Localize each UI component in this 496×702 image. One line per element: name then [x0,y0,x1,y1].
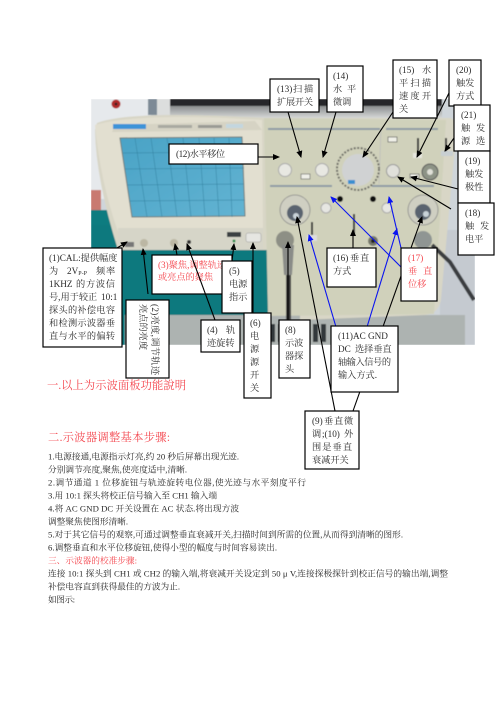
callout 13: sweep expand switch: (13) [277,84,292,94]
callout 8: probe: 头 [285,363,295,374]
text block: adjustment steps: 4.将 AC GND DC 开关设置在 AC 状态.将出现方波 [48,502,239,514]
callout 9 and 10: vertical attenuator: 外 [344,428,354,439]
callout 2: intensity (rotated) [126,300,169,378]
callout 5: power indicator: 电源 [229,278,248,289]
callout 14: horizontal fine: 平 [347,84,356,94]
callout 16: vertical mode: 方式 [333,265,351,276]
callout 17: vertical position: (17) [408,253,423,263]
callout 8: probe: (8) [285,325,296,335]
callout 19: trigger polarity: 触发 [465,168,483,179]
callout 11: input coupling: 输入方式. [338,369,377,380]
arrow: 14 to horizontal fine [323,112,336,157]
callout 14: horizontal fine: 水 [333,84,342,94]
callout 1: CAL: 直与水平的偏转 [49,330,115,341]
text block: adjustment steps: 调整聚焦使图形清晰. [48,516,128,526]
callout 9 and 10: vertical attenuator: (9) [312,416,323,426]
callout 13: sweep expand switch: 描 [304,83,313,94]
callout 5: power indicator: 指示 [229,291,248,302]
callout 9 and 10: vertical attenuator: 围是垂直 [312,441,352,452]
callout 12: horizontal position [169,144,258,164]
arrow: 1 to CAL [117,242,127,248]
text block: adjustment steps: 2.调节通道 1 位移旋钮与轨迹旋转电位器,使光迹与水平刻度平行 [48,476,306,488]
callout 18: trigger level: 发 [480,220,489,231]
callout 11: input coupling: DC [338,344,351,354]
callout 5: power indicator: (5) [229,266,240,276]
callout 2: intensity (rotated): (2)亮度,调节轨迹 [150,304,161,376]
callout 1: CAL: 为 [49,266,58,276]
callout 4: trace rotation: 轨 [226,324,235,335]
callout 9 and 10: vertical attenuator: ;(10) [322,429,340,439]
text block: adjustment steps: 1.电源接通,电源指示灯亮,约 20 秒后屏幕出现光迹. [48,450,239,462]
callout 15: horizontal sweep speed: 速度开 [399,90,431,101]
callout 8: probe: 器探 [285,350,303,361]
callout 16: vertical mode: (16) [333,253,348,263]
callout 21: trigger source [454,105,490,151]
heading: basic adjustment steps: 二.示波器调整基本步骤: [48,430,170,444]
callout 1: CAL: 1KHZ [49,279,72,289]
callout 11: input coupling: 选择垂直 [355,343,392,354]
callout 4: trace rotation [201,320,240,352]
arrow: 8 to probe [287,242,289,320]
callout 15: horizontal sweep speed: 水 [422,64,431,75]
callout 21: trigger source: 发 [476,122,485,133]
arrow: 16 to vertical mode [352,230,354,248]
callout 13: sweep expand switch: 扩展开关 [277,96,313,107]
callout 6: power switch: 源 [250,357,260,367]
callout 3: focus [152,255,232,294]
callout 19: trigger polarity: 极性 [465,181,483,192]
callout 1: CAL: 和检测示波器垂 [49,317,115,328]
text block: calibration steps: 如图示: [48,594,75,604]
callout 21: trigger source: 触 [461,123,470,133]
scope body [95,115,456,320]
callout 4: trace rotation: 迹旋转 [207,337,235,348]
arrow: 9 to CH1 volts [297,217,335,411]
callout 15: horizontal sweep speed [393,60,437,118]
callout 15: horizontal sweep speed: 关 [399,103,408,114]
callout 1: CAL [43,248,122,347]
section bars [268,128,380,130]
callout 18: trigger level: 电平 [465,233,483,244]
callout 6: power switch: 开 [250,370,259,380]
callout 16: vertical mode: 直 [360,252,369,263]
callout 6: power switch [244,313,271,398]
callout 1: CAL: 率 [106,265,115,276]
callout 13: sweep expand switch: 扫 [293,83,302,94]
callout 18: trigger level: (18) [465,208,480,218]
text block: adjustment steps: 5.对于其它信号的观察,可通过调整垂直衰减开关,扫描时间到所需的位置,从而得到清晰的图形. [48,528,403,540]
text block: adjustment steps: 6.调整垂直和水平位移旋钮,使得小型的幅度与时间容易读出. [48,542,277,552]
callout 6: power switch: 关 [250,382,259,393]
callout 1: CAL: 频 [96,265,106,276]
arrow: 15 to timebase [363,112,393,157]
callout 3: focus: 或亮点的聚焦 [158,271,214,282]
callout 11: input coupling [331,326,398,392]
text block: calibration steps: 连接 10:1 探头到 CH1 或 CH2 的输入端,将衰减开关设定到 50 μ V,连接探极探针到校正信号的输出端,调整 [48,568,448,578]
callout 1: CAL: 的方波信 [76,278,115,289]
arrow: 11 to CH2 coupling [367,229,397,327]
text block: calibration steps [48,568,448,604]
arrow: 20 to trigger mode [417,93,449,157]
arrow: 18 to level [398,177,451,209]
arrow: 19 to slope [411,177,458,189]
callout 14: horizontal fine: 微调 [333,96,351,107]
callout 9 and 10: vertical attenuator [305,411,359,469]
arrow: 5 to power lamp [232,244,234,261]
callout 14: horizontal fine [327,66,363,112]
callout 21: trigger source: (21) [461,110,476,120]
callout 11: input coupling: (11)AC GND [338,331,388,341]
callout 18: trigger level [458,203,494,255]
callout 1: CAL: 10:1 [101,292,118,302]
callout 1: CAL: (1)CAL:提供幅度 [49,252,117,263]
arrow: 6 to power switch [252,243,254,313]
callout 19: trigger polarity: (19) [465,156,480,166]
heading: calibration steps: 三、示波器的校准步骤: [48,554,137,566]
callout 3: focus: (3)聚焦,调整轨迹 [158,259,227,270]
callout 15: horizontal sweep speed: 平扫描 [399,77,431,88]
arrow: 12 to horizontal position [257,156,279,158]
text block: adjustment steps: 3.用 10:1 探头将校正信号输入至 CH1 输入端 [48,490,217,500]
callout 6: power switch: (6) [250,318,261,328]
callout 1: CAL: P-P [78,271,88,277]
callout 15: horizontal sweep speed: (15) [399,65,414,75]
callout 19: trigger polarity [458,151,490,203]
arrow: 11 to CH1 coupling [309,235,336,327]
callout 9 and 10: vertical attenuator: 直 [334,415,343,426]
callout 9 and 10: vertical attenuator: 衰减开关 [312,454,349,465]
callout 16: vertical mode: 垂 [350,252,359,263]
arrow: 17 to CH1 position [331,197,401,267]
text block: calibration steps: 补偿电容直到获得最佳的方波为止. [48,580,180,592]
callout 17: vertical position: 直 [423,265,432,276]
callout 20: trigger mode: 触发 [456,77,474,88]
callout 5: power indicator [222,261,252,313]
callout 17: vertical position: 位移 [408,278,426,289]
screen [120,137,245,217]
callout 9 and 10: vertical attenuator: 调 [312,429,321,439]
photo: oscilloscope front panel [91,99,475,345]
text block: adjustment steps [48,450,403,552]
callout 1: CAL: 号,用于较正 [49,292,97,302]
callout 1: CAL: 探头的补偿电容 [49,304,115,315]
callout 13: sweep expand switch [270,79,319,112]
callout 14: horizontal fine: (14) [333,71,348,81]
knobs [278,164,292,176]
arrow: 9 to CH2 volts [353,217,422,411]
callout 17: vertical position: 垂 [408,266,417,276]
callout 11: input coupling: 轴输入信号的 [338,356,391,367]
callout 9 and 10: vertical attenuator: 微 [344,415,353,426]
arrow: 3 to focus [175,244,177,255]
callout 12: horizontal position: (12)水平移位 [176,148,225,159]
arrow: 4 to trace rotation [187,244,215,320]
callout 20: trigger mode: 方式 [456,90,474,101]
callout 6: power switch: 电 [250,330,259,341]
callout 1: CAL: 2V [67,266,79,276]
callout 21: trigger source: 源 [461,136,470,146]
arrow: 2 to intensity [143,249,148,294]
arrow: 21 to trigger source [445,138,454,151]
callout 8: probe [279,320,310,378]
callout 2: intensity (rotated): 亮点的亮度 [138,304,149,350]
callout 17: vertical position [401,248,437,301]
callout 20: trigger mode [449,60,481,106]
arrow: 13 to sweep expand [288,112,301,157]
text block: adjustment steps: 分别调节亮度,聚焦,使亮度适中,清晰. [48,464,187,474]
callout 18: trigger level: 触 [465,221,474,231]
heading: panel function description: 一.以上为示波面板功能說明 [47,378,186,392]
callout 4: trace rotation: (4) [207,325,218,335]
callout 8: probe: 示波 [285,337,303,348]
callout 21: trigger source: 选 [476,135,485,146]
probe cable [282,245,294,275]
arrow: 17 to CH2 position [389,197,401,248]
callout 6: power switch: 源 [250,344,260,354]
callout 16: vertical mode [327,248,376,287]
callout 9 and 10: vertical attenuator: 垂 [324,415,333,426]
callout 20: trigger mode: (20) [456,65,471,75]
